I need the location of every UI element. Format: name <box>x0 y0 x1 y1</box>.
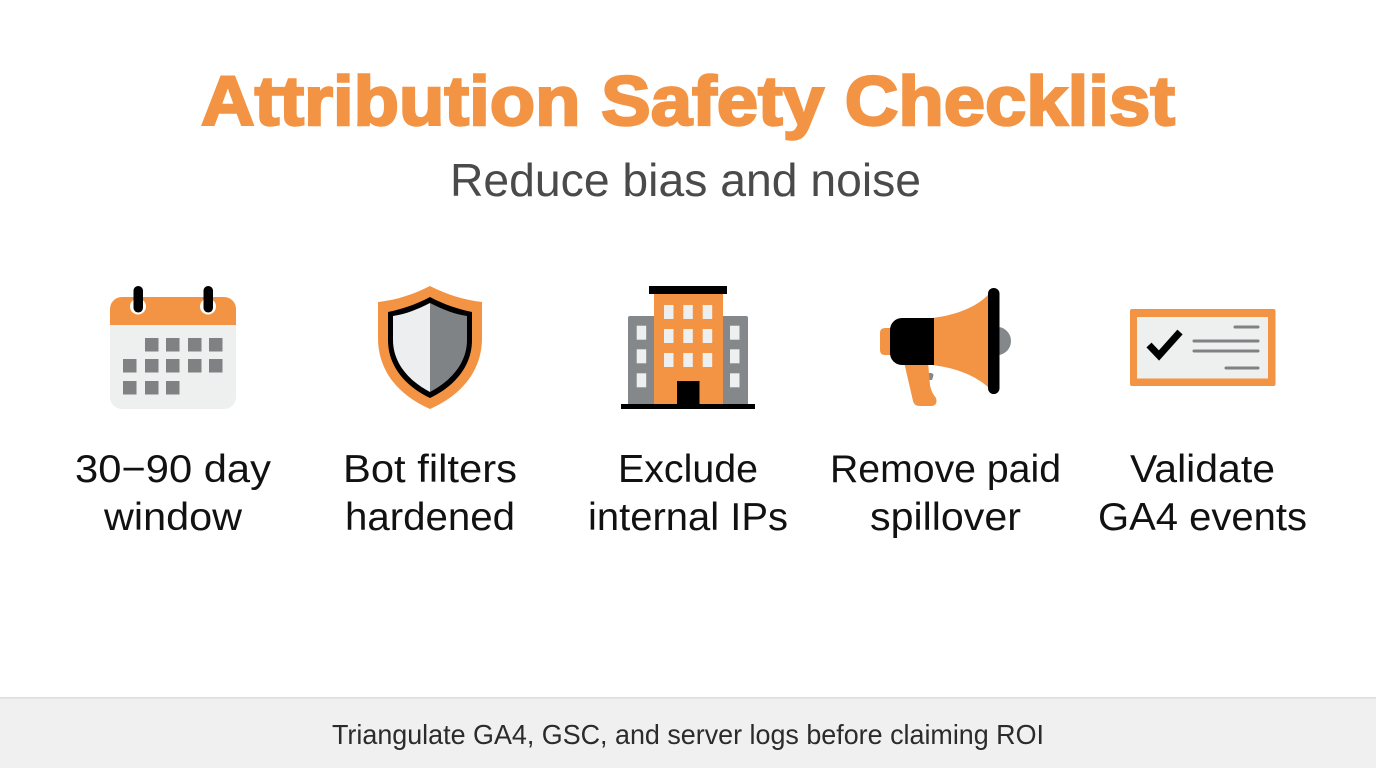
icon: shield <box>378 286 482 409</box>
icon: calendar <box>110 286 236 409</box>
label: exclude internal IPs: Exclude <box>618 448 758 491</box>
title: Attribution Safety Checklist <box>201 62 1175 140</box>
label: validate GA4 events <box>1098 448 1307 539</box>
footer bar <box>0 697 1376 768</box>
icon: megaphone <box>880 288 1011 406</box>
icon: validation checklist card <box>1130 309 1276 386</box>
icon: office building <box>621 286 755 409</box>
footer text: Triangulate GA4, GSC, and server logs before claiming ROI <box>332 719 1044 750</box>
label: bot filters hardened <box>343 448 517 539</box>
label: exclude internal IPs <box>588 448 788 539</box>
label: exclude internal IPs: internal IPs <box>588 496 788 539</box>
label: 30-90 day window <box>75 448 272 539</box>
label: remove paid spillover <box>830 448 1061 539</box>
label: bot filters hardened: hardened <box>345 496 515 539</box>
label: bot filters hardened: Bot filters <box>343 448 517 491</box>
label: validate GA4 events: GA4 events <box>1098 496 1307 539</box>
label: remove paid spillover: Remove paid <box>830 448 1061 491</box>
subtitle: Reduce bias and noise <box>450 154 921 206</box>
label: remove paid spillover: spillover <box>870 496 1021 539</box>
label: 30-90 day window: window <box>103 496 243 539</box>
label: validate GA4 events: Validate <box>1130 448 1275 491</box>
label: 30-90 day window: 30−90 day <box>75 448 272 491</box>
